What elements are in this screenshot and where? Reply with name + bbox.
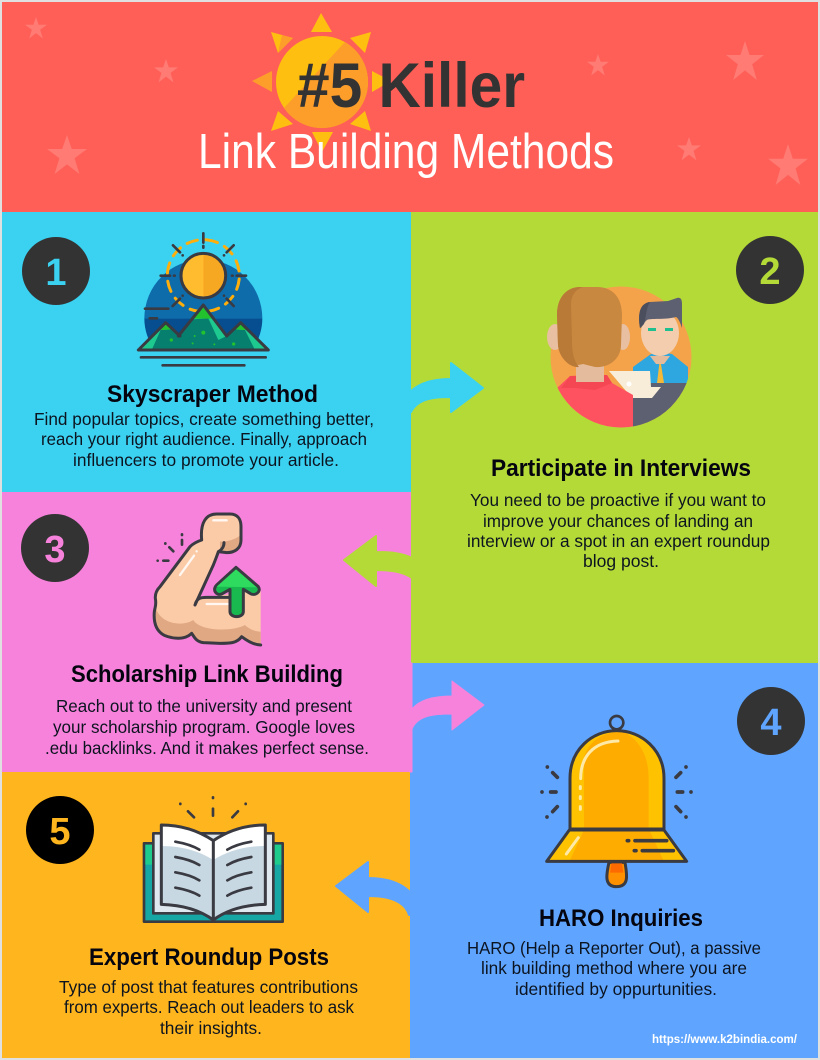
icon: flexed arm	[154, 514, 261, 645]
icon: open book	[144, 797, 283, 922]
body text	[467, 938, 761, 999]
panel: cyan, skyscraper method	[2, 212, 411, 492]
body text: HARO (Help a Reporter Out), a passive	[467, 938, 761, 958]
title line 1: #5 Killer	[297, 51, 525, 121]
body text: Type of post that features contributions	[59, 977, 358, 997]
heading: Scholarship Link Building	[71, 661, 343, 688]
arrow: step 2 to 3	[344, 536, 412, 586]
body text	[45, 696, 369, 758]
body text: interview or a spot in an expert roundup	[467, 531, 770, 551]
heading: HARO Inquiries	[539, 905, 703, 932]
arrow: step 4 to 5	[336, 862, 410, 915]
body text: influencers to promote your article.	[73, 450, 339, 470]
heading: Expert Roundup Posts	[89, 944, 329, 971]
body text: identified by oppurtunities.	[515, 979, 717, 999]
body text: Find popular topics, create something better,	[34, 409, 374, 429]
icon: sun	[252, 13, 391, 152]
background stars	[25, 17, 808, 185]
source url: https://www.k2bindia.com/	[652, 1034, 798, 1046]
body text: Reach out to the university and present	[56, 696, 352, 716]
heading: Skyscraper Method	[107, 381, 318, 408]
panel: green, participate in interviews	[411, 212, 818, 663]
arrow: step 3 to 4	[410, 663, 484, 772]
body text: reach your right audience. Finally, approach	[41, 429, 367, 449]
heading: Participate in Interviews	[491, 455, 751, 482]
man head	[639, 298, 682, 364]
woman head	[547, 287, 630, 382]
number badge 1: 1	[45, 252, 67, 294]
title line 2: Link Building Methods	[198, 125, 614, 179]
icon: mountains and sun	[138, 233, 268, 365]
body text: from experts. Reach out leaders to ask	[64, 997, 354, 1017]
number badge 2	[736, 236, 804, 304]
panel: orange, expert roundup posts	[2, 772, 410, 1058]
body text: blog post.	[583, 551, 659, 571]
body text: improve your chances of landing an	[483, 511, 753, 531]
icon: bell	[542, 716, 691, 887]
panel: blue, HARO inquiries	[410, 663, 818, 1058]
number badge 2: 2	[759, 251, 781, 293]
body text	[59, 977, 358, 1038]
number badge 5: 5	[49, 811, 71, 853]
body text: link building method where you are	[481, 958, 747, 978]
number badge 3: 3	[44, 529, 66, 571]
number badge 3	[21, 514, 89, 582]
panel: pink, scholarship link building	[2, 492, 411, 772]
body text: their insights.	[160, 1018, 262, 1038]
body text	[467, 490, 770, 571]
number badge 4	[737, 687, 805, 755]
number badge 1	[22, 237, 90, 305]
body text: .edu backlinks. And it makes perfect sense.	[45, 738, 369, 758]
number badge 4: 4	[760, 702, 782, 744]
number badge 5	[26, 796, 94, 864]
body text: your scholarship program. Google loves	[53, 717, 355, 737]
arrow: step 1 to 2	[410, 363, 483, 412]
body text	[34, 409, 374, 470]
header panel	[2, 2, 818, 212]
icon: interview	[547, 286, 692, 428]
body text: You need to be proactive if you want to	[470, 490, 766, 510]
